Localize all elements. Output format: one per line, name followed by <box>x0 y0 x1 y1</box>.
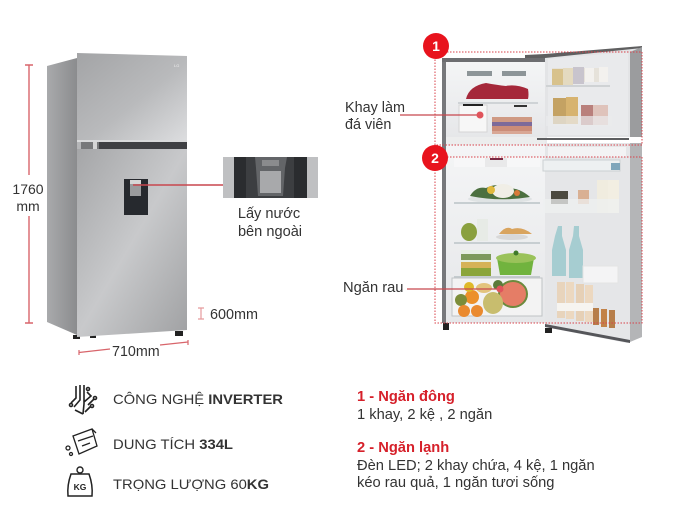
description: fridge <box>357 440 595 491</box>
spec row: capacity <box>66 429 233 456</box>
badge 2 <box>422 145 448 171</box>
height dimension 1760 mm <box>25 65 33 323</box>
fridge interior <box>446 145 545 323</box>
vegetable drawer <box>452 278 542 317</box>
badge 1: 1 <box>432 38 440 54</box>
label: ice tray: đá viên <box>345 117 391 133</box>
description: freezer: 1 - Ngăn đông <box>357 389 455 405</box>
icon: KG weight: KG <box>74 482 87 492</box>
label: vegetable drawer: Ngăn rau <box>343 280 403 296</box>
juice bottles <box>557 282 615 328</box>
meat <box>466 83 528 99</box>
label: external water: Lấy nước <box>238 206 300 222</box>
callout line: dispenser <box>133 184 223 186</box>
door seam handle <box>537 138 629 140</box>
product: closed fridge with dimensions <box>25 53 187 339</box>
fridge handle band <box>77 140 187 149</box>
open fridge door <box>543 143 642 343</box>
callout: vegetable drawer <box>407 286 504 292</box>
product: open fridge <box>442 46 642 343</box>
fridge side panel <box>47 58 77 335</box>
body outline <box>442 58 547 323</box>
fridge lower door <box>77 149 187 337</box>
description: fridge: kéo rau quả, 1 ngăn tươi sống <box>357 475 554 491</box>
containers <box>461 250 491 276</box>
fridge feet <box>443 323 552 333</box>
description: freezer <box>357 389 492 423</box>
text: weight: TRỌNG LƯỢNG 60 KG <box>113 476 269 492</box>
text: inverter: CÔNG NGHỆ INVERTER <box>113 391 283 407</box>
height label: mm <box>16 198 40 214</box>
description: fridge: 2 - Ngăn lạnh <box>357 440 449 456</box>
green pot <box>496 250 536 275</box>
middle door shelf <box>543 180 619 213</box>
freezer interior <box>446 62 545 137</box>
icon: KG weight <box>68 467 92 496</box>
height label: 1760 <box>12 181 44 197</box>
open freezer door <box>525 46 642 137</box>
depth label: 600mm <box>210 307 258 323</box>
top tray <box>454 157 540 167</box>
zone 2 dotted frame <box>435 157 642 323</box>
ice tray <box>459 105 487 132</box>
water bottles <box>552 226 583 278</box>
top door shelf <box>543 160 620 171</box>
label: external water: bên ngoài <box>238 224 302 240</box>
fridge upper door <box>77 53 187 140</box>
width dimension line <box>79 340 188 355</box>
door shelf with jars and packs <box>546 97 612 126</box>
badge 1 <box>423 33 449 59</box>
icon: pouring container <box>66 429 97 456</box>
width label: 710mm <box>112 344 160 360</box>
spec row: weight <box>68 467 269 496</box>
band between compartments <box>446 137 545 145</box>
frozen food packs <box>492 117 532 134</box>
salad plate <box>468 184 532 203</box>
spec row: inverter <box>70 385 283 414</box>
callout: ice tray <box>400 112 484 118</box>
description: fridge: Đèn LED; 2 khay chứa, 4 kệ, 1 ngăn <box>357 458 595 474</box>
zone 1 dotted frame <box>435 52 642 145</box>
inset image: water dispenser closeup <box>223 157 318 198</box>
grapes and dish <box>461 219 532 241</box>
description: freezer: 1 khay, 2 kệ , 2 ngăn <box>357 407 492 423</box>
icon: circuit <box>70 385 96 414</box>
fridge feet <box>73 331 183 339</box>
egg tray <box>583 266 618 283</box>
badge 2: 2 <box>431 150 439 166</box>
water dispenser <box>124 179 148 215</box>
door shelf with jars <box>546 67 610 87</box>
label: ice tray: Khay làm <box>345 100 405 116</box>
LG logo: LG <box>174 63 179 68</box>
depth dimension marker <box>198 308 204 319</box>
text: capacity: DUNG TÍCH 334L <box>113 436 233 452</box>
